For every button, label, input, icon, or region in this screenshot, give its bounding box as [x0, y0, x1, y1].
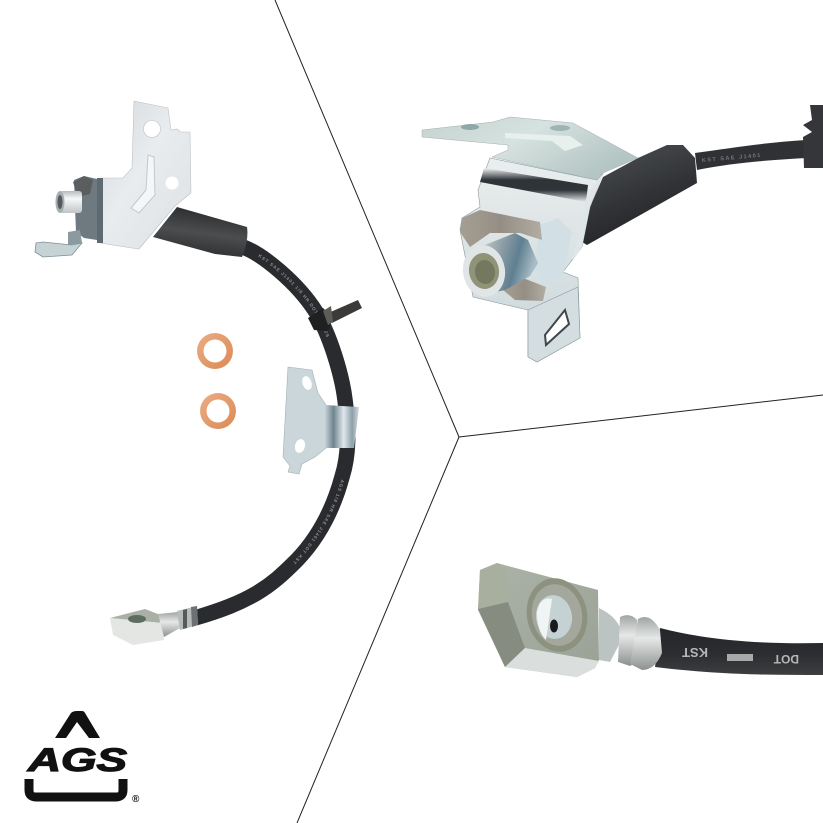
heat shrink sleeve [153, 207, 247, 257]
reflection band [480, 168, 588, 202]
barrel nut fitting [56, 176, 97, 240]
heat shrink sleeve [582, 145, 697, 245]
bottom bright facet [505, 648, 599, 677]
lower right blue plate [534, 218, 572, 287]
upper bracket [91, 101, 191, 249]
ferrule [599, 608, 623, 662]
bottom banjo fitting [110, 606, 198, 645]
detail: upper fitting close-up: KST SAE J1401 [702, 153, 762, 164]
copper washers [200, 336, 233, 426]
hose: main curve [195, 247, 348, 618]
port hole [550, 620, 558, 632]
hose lettering: DOT [773, 652, 799, 666]
full brake hose assembly [34, 100, 362, 645]
hose lettering [682, 645, 799, 666]
hose tail [695, 140, 806, 170]
AGS logo [27, 711, 140, 805]
middle bracket [283, 367, 359, 474]
logo: registered mark: ® [132, 794, 140, 805]
hose [655, 628, 823, 675]
threaded nut [480, 233, 538, 295]
banjo block [478, 563, 599, 677]
mounting tab [528, 287, 580, 362]
hose lettering: AGS 1/8 HR SAE J1401 DOT KST [294, 480, 344, 564]
lower left facet [478, 602, 525, 667]
detail: upper fitting close-up [422, 105, 823, 362]
logo: base [29, 779, 123, 797]
lower tab [35, 230, 82, 257]
upper left facet [478, 563, 508, 609]
hose clip [803, 105, 823, 168]
port seat [520, 573, 594, 657]
logo: peak [55, 711, 100, 738]
bracket front face [460, 158, 603, 362]
divider lines [275, 0, 823, 823]
hose lettering: KST [682, 645, 708, 660]
logo: wordmark: AGS [27, 742, 128, 778]
detail: lower banjo close-up [478, 563, 823, 677]
hose lettering: KST SAE J1401 1/8 HR DOT 41/032S [258, 254, 330, 337]
hose clip and stud [308, 300, 362, 331]
spring clip [460, 210, 542, 247]
right fold [572, 174, 603, 262]
hose lettering [258, 254, 344, 564]
bracket top plate [422, 117, 638, 180]
